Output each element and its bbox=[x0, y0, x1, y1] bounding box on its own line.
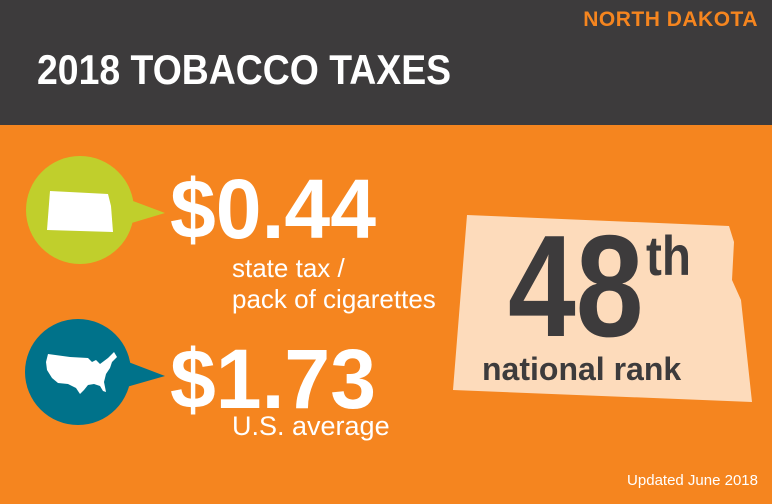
icon: ND state bubble bbox=[26, 156, 165, 264]
stat: state tax: state tax / bbox=[232, 253, 345, 283]
stat: US average: $1.73 bbox=[170, 332, 376, 426]
panel: national rank on ND shape bbox=[453, 205, 752, 402]
panel: national rank on ND shape: th bbox=[646, 224, 691, 287]
stat: state tax: $0.44 bbox=[170, 162, 376, 256]
rank number: 48 bbox=[508, 205, 643, 367]
state label: NORTH DAKOTA bbox=[583, 8, 758, 31]
stat: US average: U.S. average bbox=[232, 411, 390, 441]
stat: state tax bbox=[170, 162, 436, 314]
footer note: Updated June 2018 bbox=[627, 472, 758, 489]
icon: US bubble bbox=[25, 319, 165, 425]
header band bbox=[0, 0, 772, 125]
rank label: national rank bbox=[482, 351, 681, 387]
title: 2018 TOBACCO TAXES bbox=[37, 46, 451, 93]
stat: state tax: pack of cigarettes bbox=[232, 284, 436, 314]
